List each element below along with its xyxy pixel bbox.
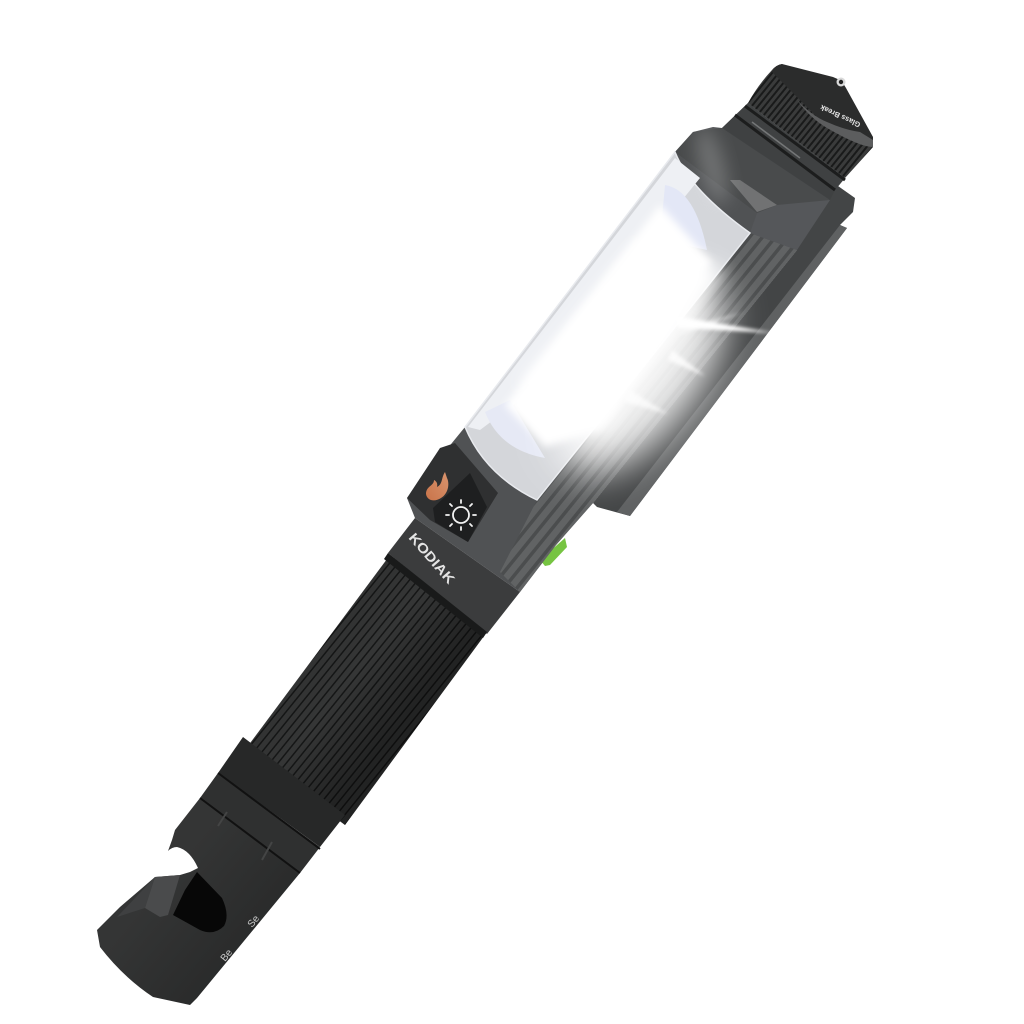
belt clip (593, 186, 855, 516)
ribbed side (500, 233, 797, 592)
light glow (505, 123, 775, 501)
lower rings (200, 737, 345, 873)
collar (384, 518, 520, 638)
glass break tip (772, 64, 873, 147)
upper shoulder facet (675, 128, 830, 232)
angled blade facet (117, 877, 155, 917)
icon: flame (426, 472, 448, 500)
light flare streaks (625, 312, 775, 414)
top haze (690, 123, 734, 207)
green switch (540, 538, 567, 566)
bottom cutter end (97, 798, 300, 1005)
top neck rings (722, 103, 845, 200)
reflector top (660, 185, 707, 250)
button panel (407, 443, 498, 542)
brand wordmark: KODIAK (406, 530, 458, 587)
icon: sun (446, 500, 476, 530)
knurled cap (748, 64, 873, 178)
ribbed grip (245, 555, 487, 825)
reflector bottom (485, 400, 545, 458)
engraved label: seat: Se (246, 913, 262, 930)
lens (465, 152, 750, 500)
label: glass break: Glass Break (818, 103, 862, 129)
cutter slot (173, 872, 227, 932)
engraved label: belt: Be (219, 947, 235, 964)
head body (407, 103, 845, 592)
